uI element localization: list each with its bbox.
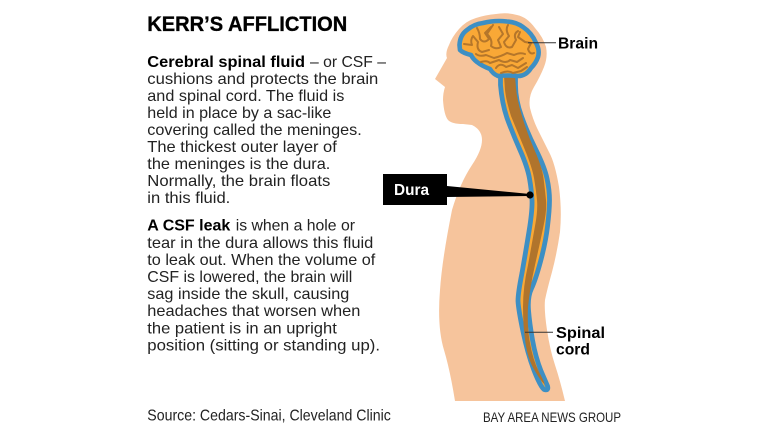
brain	[460, 21, 539, 76]
text block: CSF leak: A CSF leak	[147, 218, 230, 235]
text block: cerebral spinal fluid: the meninges is the dura.	[147, 156, 330, 173]
label: Brain: Brain	[558, 36, 598, 53]
text block: cerebral spinal fluid	[147, 54, 386, 207]
text block: cerebral spinal fluid: in this fluid.	[147, 190, 230, 207]
text block: cerebral spinal fluid: The thickest outer layer of	[147, 139, 337, 156]
text block: CSF leak: sag inside the skull, causing	[147, 286, 349, 303]
text block: cerebral spinal fluid: Cerebral spinal fluid	[147, 54, 305, 71]
text block: cerebral spinal fluid: and spinal cord. The fluid is	[147, 88, 344, 105]
text block: CSF leak: headaches that worsen when	[147, 303, 360, 320]
text block: CSF leak	[147, 218, 380, 354]
publisher credit: BAY AREA NEWS GROUP	[483, 409, 621, 425]
source credit: Source: Cedars-Sinai, Cleveland Clinic	[147, 408, 391, 425]
label: Spinal cord: Spinal	[556, 325, 605, 342]
text block: CSF leak: to leak out. When the volume of	[147, 252, 376, 269]
text block: cerebral spinal fluid: – or CSF –	[310, 54, 386, 71]
title: KERR’S AFFLICTION	[147, 13, 347, 36]
text block: CSF leak: CSF is lowered, the brain will	[147, 269, 352, 286]
text block: cerebral spinal fluid: cushions and protects the brain	[147, 71, 378, 88]
callout: Dura	[383, 174, 534, 205]
dura and fluid tube	[500, 75, 550, 390]
text block: CSF leak: the patient is in an upright	[147, 320, 337, 337]
brain outline	[460, 21, 539, 76]
text block: cerebral spinal fluid: held in place by a sac-like	[147, 105, 331, 122]
text block: CSF leak: is when a hole or	[236, 218, 356, 235]
text block: cerebral spinal fluid: Normally, the brain floats	[147, 173, 330, 190]
text block: cerebral spinal fluid: covering called the meninges.	[147, 122, 362, 139]
callout: Dura: Dura	[394, 182, 429, 199]
spinal cord	[504, 76, 546, 384]
label: Brain	[528, 36, 598, 53]
label: Spinal cord: cord	[556, 342, 590, 358]
spinal canal	[500, 75, 550, 390]
brain folds	[464, 25, 534, 73]
text block: CSF leak: tear in the dura allows this fluid	[147, 235, 373, 252]
body silhouette	[435, 13, 565, 401]
text block: CSF leak: position (sitting or standing up).	[147, 337, 380, 354]
label: Spinal cord	[525, 325, 605, 358]
